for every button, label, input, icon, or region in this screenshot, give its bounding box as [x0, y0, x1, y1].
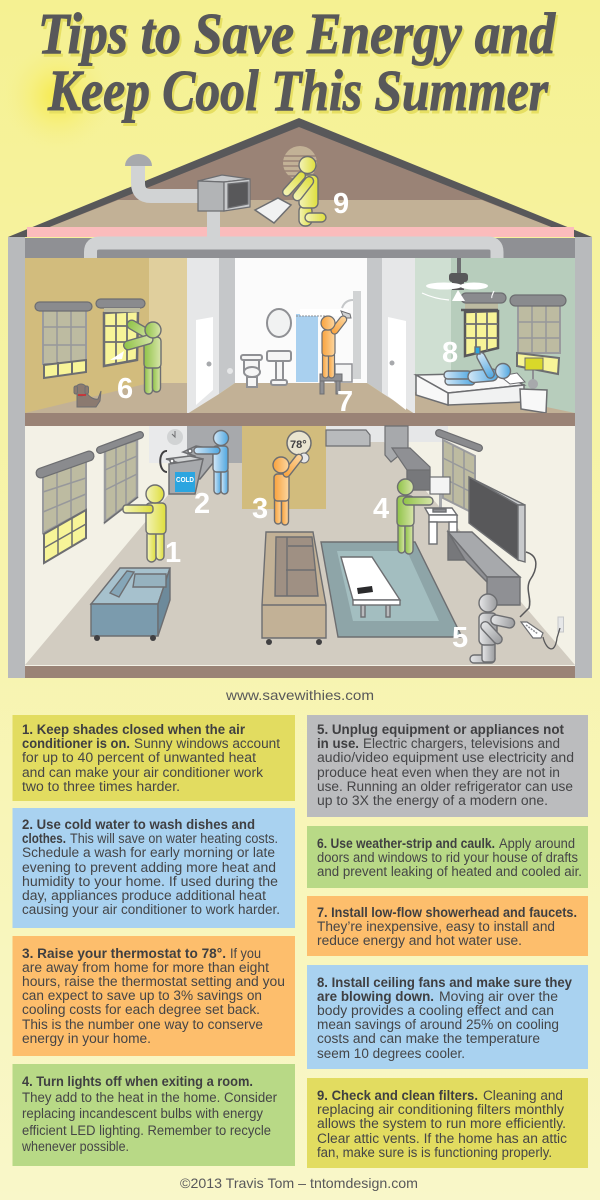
tip 2: day, appliances produce additional heat [22, 888, 266, 903]
tip 2: clothes. [22, 831, 66, 846]
sink [267, 351, 291, 385]
tip 5: Electric chargers, televisions and [363, 736, 560, 751]
website url: www.savewithies.com [225, 687, 374, 703]
cold label: COLD [176, 475, 194, 484]
tip 3 [12, 936, 295, 1056]
person 2 [194, 430, 228, 494]
person 3 [273, 453, 304, 525]
ventilation pipe [125, 154, 220, 238]
washer hose [160, 451, 167, 472]
tip 2: evening to prevent adding more heat and [22, 860, 276, 875]
dog [74, 384, 101, 407]
ceiling fan [422, 258, 494, 301]
air conditioning unit [198, 175, 250, 211]
table lamp [430, 477, 450, 509]
mirror [267, 309, 291, 337]
room: left bedroom [25, 258, 187, 414]
tip 3: are away from home for more than eight [22, 960, 269, 975]
tip 6: and prevent leaking of heated and cooled air. [317, 864, 582, 879]
tip 3: hours, raise the thermostat setting and you [22, 974, 285, 989]
footer credit: ©2013 Travis Tom – tntomdesign.com [180, 1175, 418, 1191]
tip 1: 1. Keep shades closed when the air [22, 722, 246, 737]
tv cord [520, 552, 536, 617]
tip 8: are blowing down. [317, 989, 434, 1004]
title [38, 1, 558, 126]
tip 3: This is the number one way to conserve [22, 1017, 263, 1032]
tip 8: body provides a cooling effect and can [317, 1003, 554, 1018]
tip 8: 8. Install ceiling fans and make sure they [317, 975, 572, 990]
tip 2 [12, 808, 295, 928]
left and right walls [8, 237, 25, 678]
television [469, 477, 525, 562]
fireplace [385, 426, 430, 490]
tip 3: cooling costs for each degree set back. [22, 1002, 260, 1017]
power strip [521, 622, 543, 638]
tip 9: Cleaning and [483, 1088, 563, 1103]
hall wall left [187, 258, 235, 414]
person 8 [444, 347, 510, 385]
filter [255, 198, 291, 223]
person 9 [281, 156, 326, 226]
tip 8: seem 10 degrees cooler. [317, 1046, 465, 1061]
window with shade [35, 302, 92, 378]
brown sofa [262, 532, 326, 645]
clock [167, 429, 183, 445]
window 2 [100, 435, 140, 523]
person 5 [470, 594, 516, 663]
window 1 [41, 456, 89, 563]
attic vent [283, 146, 317, 180]
thermostat [287, 431, 311, 463]
number 5: 5 [452, 622, 468, 654]
tip 1: two to three times harder. [22, 779, 180, 794]
tip 8: mean savings of around 25% on cooling [317, 1017, 559, 1032]
tip 1: Sunny windows account [134, 736, 280, 751]
room: bathroom [187, 258, 415, 418]
caulk spot [226, 368, 234, 374]
tip 9: 9. Check and clean filters. [317, 1088, 478, 1103]
number 7: 7 [337, 386, 353, 418]
tip 1 [12, 715, 295, 801]
pillow [500, 373, 525, 384]
main duct [90, 243, 497, 258]
number 9: 9 [333, 188, 349, 220]
tip 5: in use. [317, 736, 359, 751]
tip 5: use. Running an older refrigerator can use [317, 779, 573, 794]
tip 5: produce heat even when they are not in [317, 765, 560, 780]
number 4: 4 [373, 493, 389, 525]
rug [321, 542, 462, 637]
washer [166, 449, 203, 494]
tip 3: 3. Raise your thermostat to 78°. [22, 946, 226, 961]
tip 2: 2. Use cold water to wash dishes and [22, 817, 255, 832]
toilet [241, 355, 262, 387]
person 7 [321, 315, 348, 378]
thermostat: 78° [290, 439, 307, 451]
nightstand [520, 389, 547, 413]
tip 7: They’re inexpensive, easy to install and [317, 919, 555, 934]
tip 6: doors and windows to rid your house of drafts [317, 850, 578, 865]
tip 3: can expect to save up to 3% savings on [22, 988, 262, 1003]
stool [320, 374, 342, 394]
walls and floor [25, 426, 575, 666]
blue sofa [91, 568, 170, 641]
window with shade [510, 295, 566, 374]
tip 4: whenever possible. [21, 1139, 129, 1154]
dryer [183, 446, 213, 479]
tip 6: Apply around [499, 836, 575, 851]
tip 9: replacing air conditioning filters monthly [317, 1102, 564, 1117]
tip 9 [307, 1078, 588, 1168]
bed [416, 373, 524, 405]
number 1: 1 [165, 537, 181, 569]
side table [425, 508, 457, 544]
tip 9: fan, make sure is is functioning properly. [317, 1145, 552, 1160]
number 8: 8 [442, 337, 458, 369]
tip 4: efficient LED lighting. Remember to recycle [22, 1123, 271, 1138]
tip 6 [307, 826, 588, 888]
tip 3: energy in your home. [22, 1031, 151, 1046]
lamp [525, 358, 543, 389]
tip 8: Moving air over the [439, 989, 558, 1004]
ceiling cavity [25, 238, 575, 258]
number 3: 3 [252, 493, 268, 525]
tip 7: reduce energy and hot water use. [317, 933, 522, 948]
tip 8: costs and can make the temperature [317, 1031, 540, 1046]
wall outlet [543, 617, 564, 649]
person 6 [123, 319, 161, 394]
coffee table [341, 557, 400, 617]
roof [8, 118, 592, 237]
hall wall right [367, 258, 415, 414]
tip 5: 5. Unplug equipment or appliances not [317, 722, 564, 737]
tip 9: allows the system to run more efficiently. [317, 1116, 566, 1131]
tip 2: humidity to your home. If used during the [22, 874, 278, 889]
number 2: 2 [194, 488, 210, 520]
room: right bedroom [415, 258, 575, 414]
tip 5: audio/video equipment use electricity and [317, 750, 574, 765]
tip 1: for up to 40 percent of unwanted heat [22, 750, 256, 765]
tip 2: This will save on water heating costs. [70, 831, 278, 846]
bathtub [335, 364, 352, 382]
shower curtain [296, 291, 361, 382]
tip 7 [307, 896, 588, 956]
tip 8 [307, 965, 588, 1069]
tip 4: 4. Turn lights off when exiting a room. [22, 1074, 253, 1089]
tip 1: and can make your air conditioner work [22, 765, 263, 780]
attic [8, 118, 592, 238]
living room [25, 426, 575, 666]
tip 7: 7. Install low-flow showerhead and faucets. [317, 905, 577, 920]
tv stand [448, 532, 520, 605]
person 1 [123, 485, 166, 562]
sun glow [2, 40, 114, 152]
tip 4 [12, 1064, 295, 1166]
tip 5 [307, 715, 588, 817]
tip 4: They add to the heat in the home. Consider [22, 1090, 277, 1105]
right window [439, 433, 479, 514]
open window [96, 299, 145, 366]
person 4 [397, 479, 433, 554]
tip 1: conditioner is on. [22, 736, 130, 751]
tip 4: replacing incandescent bulbs with energy [22, 1106, 263, 1121]
house structure [8, 237, 592, 678]
tip 2: causing your air conditioner to work harder. [22, 902, 280, 917]
light grey shelf [326, 430, 370, 446]
number 6: 6 [117, 373, 133, 405]
tip 6: 6. Use weather-strip and caulk. [317, 836, 495, 851]
tip 3: If you [230, 946, 261, 961]
tip 5: up to 3X the energy of a modern one. [317, 793, 548, 808]
open window [461, 293, 506, 356]
tip 9: Clear attic vents. If the home has an attic [317, 1131, 567, 1146]
tip 2: Schedule a wash for early morning or late [22, 845, 275, 860]
floor beams [25, 413, 575, 678]
